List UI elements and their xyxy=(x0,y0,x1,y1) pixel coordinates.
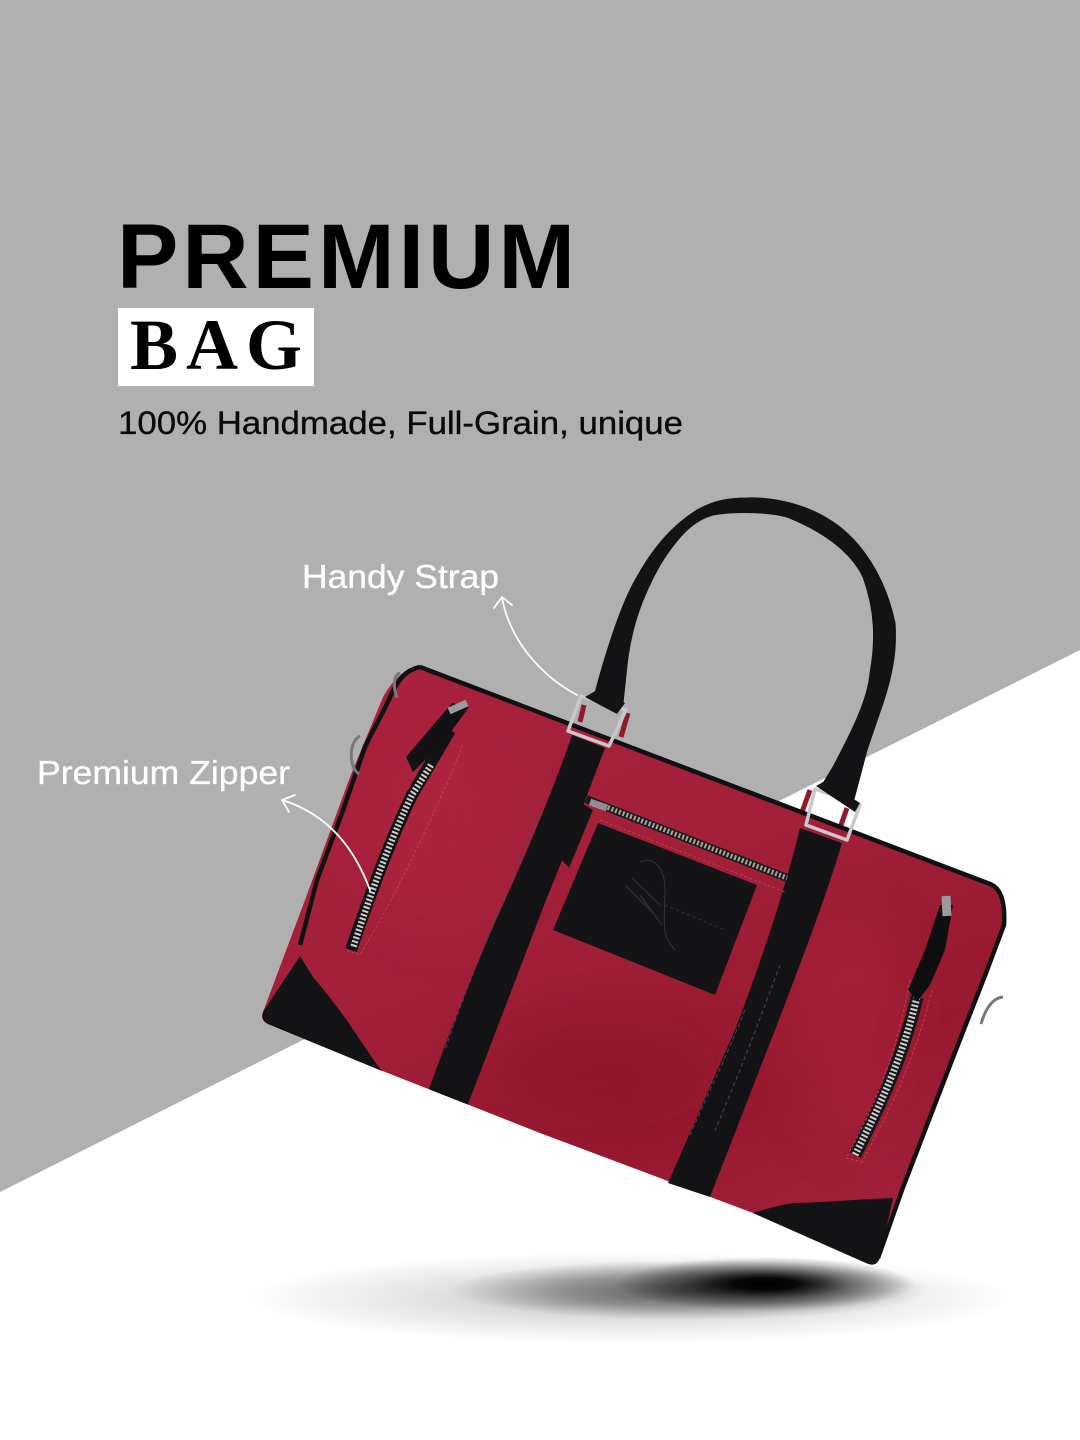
handle tab: right xyxy=(816,781,860,812)
leather logo patch xyxy=(553,823,757,995)
fabric shading xyxy=(360,730,910,1140)
label: Handy Strap: Handy Strap xyxy=(302,558,499,595)
leather corner: bottom left xyxy=(262,956,382,1071)
bag handle xyxy=(595,498,895,803)
background: white diagonal panel xyxy=(0,650,1080,1440)
left zipper xyxy=(345,703,469,955)
product: red duffel bag xyxy=(262,498,1005,1265)
label: Premium Zipper: Premium Zipper xyxy=(37,754,290,791)
red loops behind rings xyxy=(580,705,847,828)
leather strap: left xyxy=(428,735,605,1112)
ground shadow xyxy=(245,1252,1015,1344)
arrow: Handy Strap xyxy=(494,597,577,695)
leather corner: bottom right xyxy=(753,1198,893,1265)
handle tab: left xyxy=(585,690,625,714)
metal strap ring: right xyxy=(806,789,860,840)
title: PREMIUM: PREMIUM xyxy=(117,206,575,308)
bag body xyxy=(262,665,1005,1265)
arrow: Premium Zipper xyxy=(282,795,370,890)
front zipper xyxy=(560,799,787,892)
metal strap ring: left xyxy=(568,696,626,746)
left edge piping xyxy=(300,667,420,945)
side ring hardware xyxy=(351,673,1003,1024)
tagline: 100% Handmade, Full-Grain, unique xyxy=(118,405,683,441)
right zipper xyxy=(846,896,953,1162)
strap stitching xyxy=(445,810,780,1135)
subtitle badge: BAG: BAG xyxy=(130,305,302,385)
top edge piping xyxy=(420,667,1004,1258)
leather strap: right xyxy=(668,828,842,1197)
